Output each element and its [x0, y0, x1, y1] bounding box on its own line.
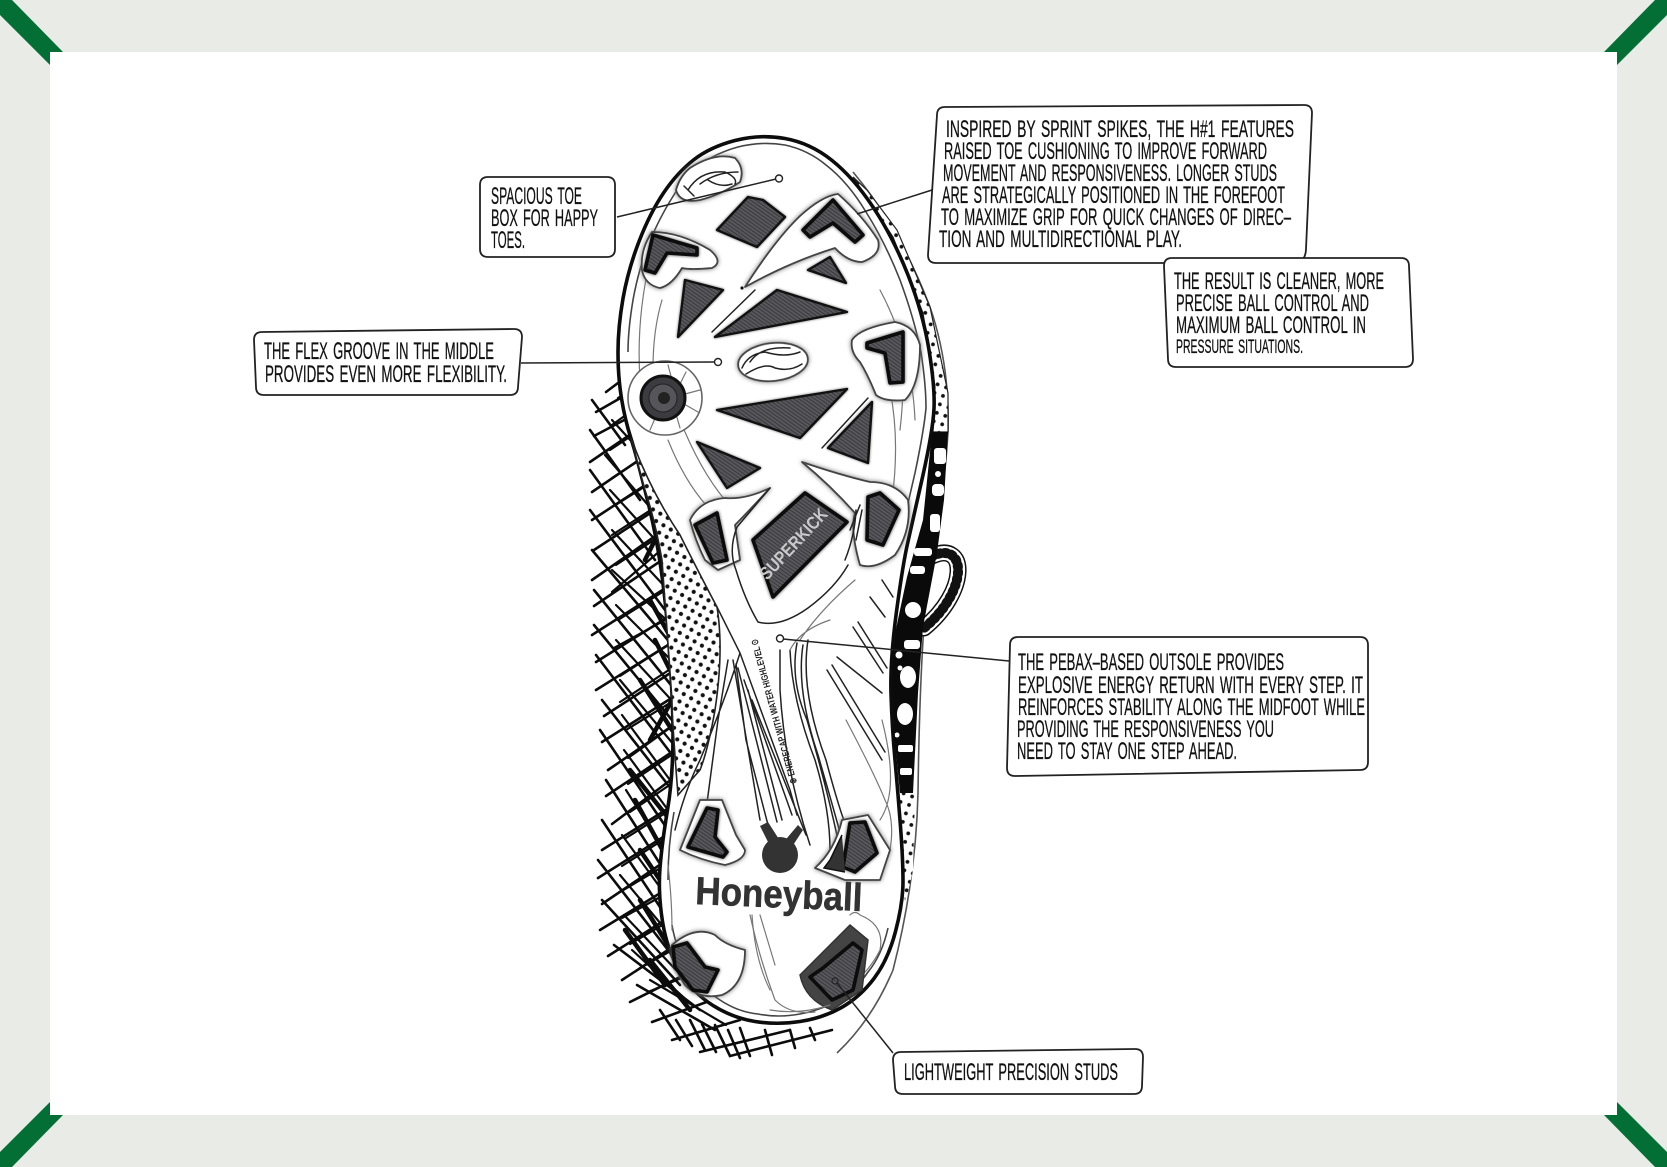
printed text on midsole: ⊛ ENERECAP WITH WATER HIGHLEVEL ⊙ [749, 638, 800, 785]
stud: right chevron [852, 322, 920, 400]
plate: SUPERKICK: SUPERKICK [756, 504, 832, 584]
box: flex groove [254, 329, 522, 395]
text: pebax outsole: PROVIDING THE RESPONSIVENESS YOU [1017, 716, 1274, 743]
upper: thin outer contour [837, 172, 948, 1053]
text: ball control: PRESSURE SITUATIONS. [1176, 337, 1303, 358]
stud: top left chevron [642, 232, 718, 288]
leader: sprint spikes [857, 190, 932, 214]
text: pebax outsole: NEED TO STAY ONE STEP AHEAD. [1017, 738, 1237, 765]
leader: studs [837, 983, 893, 1053]
stud: heel lower right [750, 912, 881, 1012]
callout: studs [832, 978, 1143, 1094]
leader: flex groove [521, 362, 715, 363]
callout: sprint spikes [857, 105, 1312, 263]
text: toe box: SPACIOUS TOE [491, 183, 582, 210]
leader: toe box [617, 179, 776, 217]
stud: upper wide triangle [712, 290, 847, 337]
marker: flex groove [714, 358, 722, 366]
text: sprint spikes: TO MAXIMIZE GRIP FOR QUICK CHANGES OF DIREC– [941, 204, 1291, 231]
text: ball control: THE RESULT IS CLEANER, MORE [1174, 268, 1384, 295]
text: sprint spikes: INSPIRED BY SPRINT SPIKES, THE H#1 FEATURES [946, 116, 1294, 143]
text: ball control: PRECISE BALL CONTROL AND [1176, 290, 1369, 317]
text: toe box: BOX FOR HAPPY [491, 205, 598, 232]
text: pebax outsole: EXPLOSIVE ENERGY RETURN WITH EVERY STEP. IT [1018, 672, 1363, 699]
brand mark [760, 822, 803, 873]
forefoot diagonal hatches [827, 580, 893, 760]
marker: toe box [776, 175, 782, 182]
sole inner contour [628, 143, 926, 1016]
text: sprint spikes: RAISED TOE CUSHIONING TO IMPROVE FORWARD [944, 138, 1267, 165]
text: studs: LIGHTWEIGHT PRECISION STUDS [904, 1059, 1118, 1086]
crosshatched grass shadow [590, 380, 832, 1058]
swoosh: lower right [802, 462, 909, 566]
box: pebax outsole [1007, 637, 1368, 776]
callout: toe box [480, 175, 782, 257]
leader: pebax outsole [783, 639, 1009, 661]
heel lines [668, 865, 830, 1012]
stud: centre oval [736, 339, 810, 385]
illustration: football boot sole [590, 137, 958, 1058]
callout: ball control [1164, 258, 1413, 367]
text: sprint spikes: MOVEMENT AND RESPONSIVENESS. LONGER STUDS [943, 160, 1277, 187]
stud: lower left [690, 488, 770, 570]
stud: toe (top left) [676, 156, 742, 201]
forefoot flow lines [639, 260, 915, 505]
dotted arch upper [631, 438, 720, 795]
stud: lower wide triangle [717, 389, 847, 438]
box: ball control [1164, 258, 1413, 367]
brand name: Honeyball [695, 870, 863, 920]
text: sprint spikes: TION AND MULTIDIRECTIONAL PLAY. [939, 226, 1182, 253]
tiny mark [740, 286, 744, 290]
text: flex groove: THE FLEX GROOVE IN THE MIDDLE [264, 338, 494, 365]
marker: pebax outsole [776, 635, 784, 642]
text: ball control: MAXIMUM BALL CONTROL IN [1176, 312, 1366, 339]
text: toe box: TOES. [491, 227, 525, 254]
callout: pebax outsole [776, 635, 1368, 776]
stud: swoosh chevron top right [745, 194, 879, 287]
stud: heel right [815, 815, 890, 880]
callout: flex groove [254, 329, 722, 395]
upper: black printed band [890, 432, 948, 810]
text: flex groove: PROVIDES EVEN MORE FLEXIBILITY. [265, 361, 507, 388]
stud: heel left [680, 800, 745, 865]
upper: dotted lower rim [898, 793, 915, 905]
stud: right triangle [822, 398, 872, 463]
box: studs [893, 1049, 1143, 1094]
sole base [618, 137, 934, 1023]
stud: small triangle [808, 257, 846, 283]
text: pebax outsole: REINFORCES STABILITY ALONG THE MIDFOOT WHILE [1018, 694, 1365, 721]
box: toe box [480, 177, 615, 257]
stud: left triangle [678, 280, 723, 337]
lace loop [924, 553, 958, 628]
stud: heel lower left [672, 932, 745, 996]
text: pebax outsole: THE PEBAX–BASED OUTSOLE PROVIDES [1018, 649, 1284, 676]
marker: studs [832, 978, 838, 984]
midfoot ribs [675, 607, 806, 835]
plate: SUPERKICK [732, 488, 848, 623]
upper: dotted rim [853, 177, 948, 432]
stud: left triangle lower [697, 442, 760, 488]
text: sprint spikes: ARE STRATEGICALLY POSITIONED IN THE FOREFOOT [942, 182, 1285, 209]
stud: top centre diamond [717, 197, 785, 247]
box: sprint spikes [928, 105, 1312, 263]
stud: round left [628, 361, 702, 435]
